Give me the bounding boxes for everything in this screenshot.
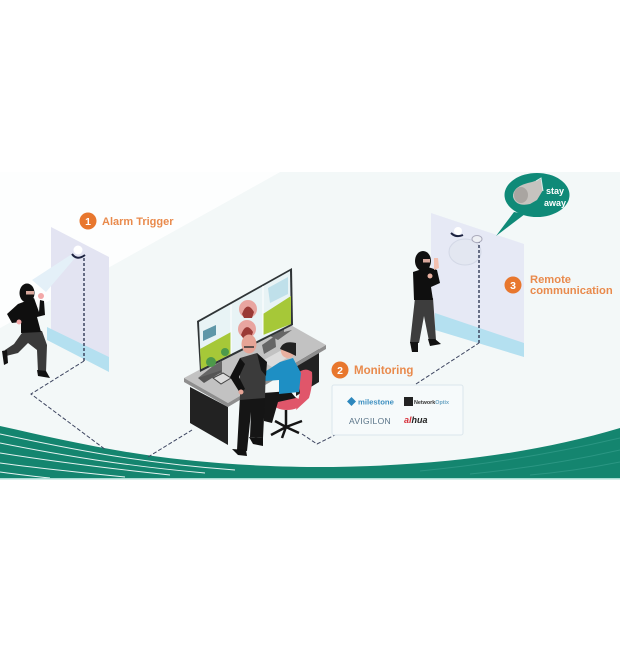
small monitor on desk — [262, 336, 276, 354]
speech bubble: stay away: stay — [546, 186, 564, 196]
video wall monitor — [197, 268, 293, 383]
icon: horn speaker — [513, 178, 543, 205]
panel: remote wall — [431, 213, 524, 357]
logo: Avigilon: AVIGILON — [349, 416, 391, 426]
step 2 label: 2 — [337, 365, 343, 377]
speech bubble: stay away: away — [544, 198, 566, 208]
standing guard — [230, 334, 267, 456]
green wave band — [0, 426, 620, 480]
logo: Dahua: alhua — [404, 415, 428, 425]
speech bubble: stay away — [496, 173, 570, 236]
icon: remote camera — [451, 227, 463, 236]
step 1 label: 1 — [85, 216, 91, 228]
operator seated — [263, 342, 301, 423]
step 2 label — [332, 362, 413, 378]
icon: alarm camera — [72, 246, 85, 258]
connection: dashed line from sensor to monitoring — [31, 258, 335, 457]
figure: running intruder — [2, 284, 50, 378]
step 1 label: Alarm Trigger — [102, 216, 174, 228]
step 1 label — [80, 212, 174, 230]
logo: milestone: milestone — [358, 398, 395, 406]
keyboard — [262, 351, 290, 367]
connection: dashed line from monitoring to speaker — [416, 242, 479, 384]
panel: alarm sensor wall — [32, 227, 109, 372]
desk — [184, 323, 326, 445]
floor background — [0, 172, 620, 478]
step 3 label: 3 — [510, 280, 516, 292]
logo: Network Optix: NetworkOptix — [414, 400, 449, 406]
panel: partner logos — [332, 385, 463, 435]
step 3 label: communication — [530, 285, 613, 297]
icon: wall speaker — [472, 236, 482, 242]
step 3 label: Remote — [530, 274, 571, 286]
monitoring workstation — [184, 268, 326, 456]
step 3 label — [504, 274, 613, 297]
step 2 label: Monitoring — [354, 365, 413, 377]
swivel chair — [271, 370, 312, 438]
figure: standing intruder — [410, 251, 441, 352]
